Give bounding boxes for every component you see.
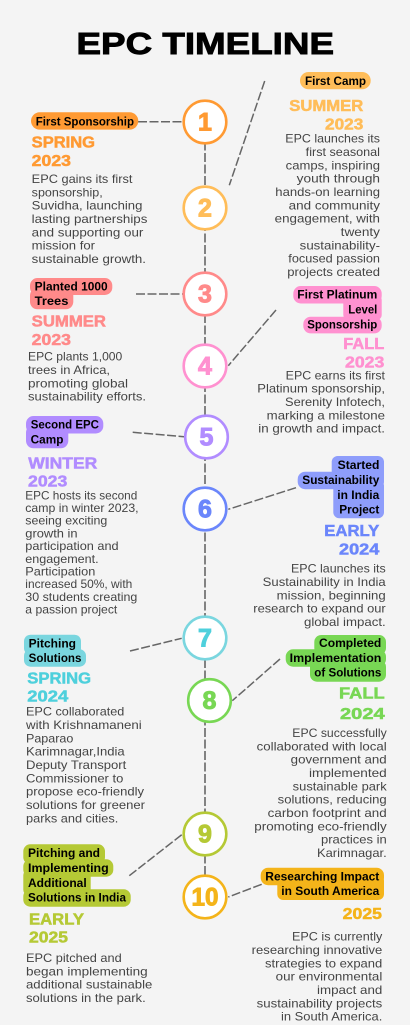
description: twenty: [341, 225, 380, 239]
description: in South America.: [281, 1010, 382, 1024]
season heading: EARLY: [29, 911, 85, 928]
description: sustainable growth.: [32, 252, 146, 266]
milestone 5: second EPC camp: [25, 416, 228, 617]
description: trees in Africa,: [28, 363, 110, 377]
description: growth in: [25, 526, 78, 540]
label pill: [300, 72, 371, 89]
description: youth through: [297, 172, 380, 186]
description: Karimnagar.: [317, 846, 387, 860]
description: Paparao: [26, 731, 74, 745]
milestone 1: first sponsorship: [31, 101, 226, 266]
milestone 10: researching impact: [184, 868, 384, 1024]
number badge 1: [184, 101, 226, 143]
description: solutions, reducing: [278, 793, 387, 807]
description: research to expand our: [253, 602, 386, 616]
description: hands-on learning: [275, 185, 380, 199]
label pill: [31, 112, 138, 130]
label pill: of Solutions: [314, 668, 381, 680]
description: EPC is currently: [292, 930, 382, 944]
label pill: First Camp: [305, 76, 366, 88]
description: camp in winter 2023,: [25, 501, 139, 515]
connector: [229, 81, 265, 185]
description: a passion project: [25, 603, 118, 617]
description: [275, 132, 380, 279]
description: seeing exciting: [25, 514, 107, 528]
season heading: 2025: [29, 930, 68, 947]
description: [25, 488, 139, 617]
description: carbon footprint and: [268, 806, 387, 820]
label pill: Planted 1000: [35, 281, 108, 293]
description: lasting partnerships: [32, 212, 147, 226]
season heading: [343, 336, 385, 371]
season heading: FALL: [339, 685, 385, 702]
label pill: [298, 456, 384, 518]
description: engagement.: [25, 552, 99, 566]
season heading: 2023: [32, 153, 71, 170]
label pill: in South America: [281, 886, 380, 898]
label pill: in India: [337, 490, 380, 502]
description: EPC successfully: [292, 726, 387, 740]
season heading: 2024: [339, 541, 380, 558]
description: and community: [289, 198, 380, 212]
label pill: Researching Impact: [265, 871, 379, 883]
number badge 7: 7: [198, 624, 212, 652]
label pill: Implementation: [290, 653, 381, 665]
description: 30 students creating: [25, 590, 137, 604]
label pill: [24, 635, 86, 667]
milestone 3: planted 1000 trees: [28, 273, 226, 404]
number badge 6: 6: [198, 496, 212, 524]
number badge 4: 4: [198, 352, 212, 380]
description: collaborated with local: [257, 739, 387, 753]
description: Karimnagar,India: [26, 745, 125, 759]
number badge 5: 5: [200, 424, 214, 452]
description: [26, 951, 153, 1005]
season heading: [29, 911, 85, 947]
description: strategies to expand: [265, 956, 382, 970]
description: Suvidha, launching: [32, 199, 142, 213]
label pill: Started: [338, 460, 379, 472]
label pill: Completed: [319, 638, 381, 650]
label pill: [293, 286, 382, 333]
label pill: Project: [339, 505, 379, 517]
description: promoting eco-friendly: [254, 819, 387, 833]
label pill: Solutions: [29, 653, 81, 665]
description: our environmental: [276, 970, 382, 984]
number badge 6: [184, 488, 226, 530]
season heading: EARLY: [324, 523, 380, 540]
season heading: [32, 314, 106, 349]
milestone 6: sustainability in India: [184, 456, 386, 629]
description: focused passion: [288, 252, 380, 266]
description: global impact.: [304, 615, 386, 629]
season heading: 2023: [345, 354, 385, 371]
season heading: 2024: [27, 689, 69, 706]
season heading: 2023: [325, 116, 364, 133]
milestone 4: first platinum sponsorship: [184, 286, 386, 436]
description: solutions in the park.: [26, 991, 146, 1005]
label pill: Implementing: [28, 863, 109, 875]
season heading: FALL: [343, 336, 384, 353]
label pill: Sustainability: [302, 475, 380, 487]
milestone 7: pitching solutions: [24, 617, 226, 825]
label pill: Solutions in India: [28, 893, 127, 905]
connector: [228, 310, 276, 366]
number badge 9: [184, 813, 226, 855]
milestone 8: completed implementation: [188, 635, 388, 860]
description: Serenity Infotech,: [285, 395, 385, 409]
season heading: SPRING: [32, 135, 95, 152]
description: sponsorship,: [32, 185, 103, 199]
number badge 3: [184, 273, 226, 315]
season heading: [27, 670, 91, 706]
label pill: [30, 278, 112, 309]
description: researching innovative: [252, 943, 383, 957]
label pill: Additional: [28, 878, 87, 890]
season heading: SUMMER: [32, 314, 106, 331]
description: EPC collaborated: [26, 705, 124, 719]
description: [25, 705, 145, 825]
description: propose eco-friendly: [26, 785, 144, 799]
description: EPC pitched and: [26, 951, 122, 965]
number badge 10: [184, 876, 226, 918]
description: EPC gains its first: [32, 172, 133, 186]
label pill: [26, 416, 103, 448]
label pill: Camp: [31, 434, 63, 446]
number badge 2: [184, 187, 226, 229]
number badge 8: [188, 679, 231, 722]
label pill: First Sponsorship: [36, 116, 134, 128]
connector: [228, 488, 296, 509]
description: [257, 368, 386, 436]
milestone 9: pitching and implementing: [23, 813, 226, 1005]
description: sustainability projects: [257, 996, 382, 1010]
season heading: [324, 523, 380, 558]
season heading: 2023: [32, 332, 71, 349]
number badge 5: [185, 416, 228, 458]
description: EPC earns its first: [286, 368, 386, 382]
connector: [130, 638, 182, 651]
number badge 7: [184, 617, 226, 659]
label pill: [261, 868, 384, 900]
description: Commissioner to: [26, 771, 124, 785]
connector: [136, 293, 183, 295]
connector: [133, 432, 184, 437]
label pill: Pitching: [29, 638, 76, 650]
description: [252, 930, 383, 1024]
season heading: 2024: [340, 706, 385, 723]
description: sustainability efforts.: [28, 390, 146, 404]
description: [254, 726, 388, 860]
description: increased 50%, with: [25, 577, 132, 591]
description: parks and cities.: [26, 811, 118, 825]
description: [253, 562, 386, 629]
description: participation and: [25, 539, 119, 553]
season heading: 2025: [343, 906, 382, 923]
description: practices in: [321, 833, 387, 847]
season heading: SPRING: [27, 670, 91, 687]
connector: [232, 659, 280, 701]
label pill: Pitching and: [28, 848, 100, 860]
description: [28, 350, 146, 404]
description: mission, beginning: [277, 588, 386, 602]
description: marking a milestone: [267, 408, 385, 422]
label pill: Second EPC: [31, 420, 99, 432]
description: solutions for greener: [26, 798, 145, 812]
description: Deputy Transport: [26, 758, 127, 772]
description: projects created: [287, 265, 380, 279]
season heading: 2023: [28, 474, 68, 491]
description: and supporting our: [32, 225, 143, 239]
number badge 8: 8: [203, 687, 217, 715]
milestone 2: first camp: [184, 72, 380, 279]
description: Participation: [25, 564, 95, 578]
number badge 10: 10: [192, 884, 218, 912]
number badge 4: [184, 345, 226, 387]
number badge 1: 1: [198, 108, 212, 136]
description: Sustainability in India: [263, 575, 386, 589]
number badge 2: 2: [198, 194, 212, 222]
connector: [129, 834, 182, 876]
label pill: [23, 844, 131, 907]
number badge 9: 9: [198, 820, 212, 848]
label pill: First Platinum: [297, 289, 377, 301]
description: EPC plants 1,000: [28, 350, 123, 364]
description: with Krishnamaneni: [25, 718, 142, 732]
description: camps, inspiring: [286, 158, 380, 172]
season heading: SUMMER: [289, 98, 363, 115]
description: sustainability-: [300, 238, 380, 252]
connector: [228, 884, 262, 897]
title: EPC TIMELINE: [76, 26, 334, 61]
description: Platinum sponsorship,: [257, 382, 385, 396]
description: [32, 172, 147, 266]
timeline spine: [204, 130, 206, 918]
description: government and: [291, 753, 387, 767]
season heading: WINTER: [28, 455, 97, 472]
description: sustainable park: [293, 779, 388, 793]
description: additional sustainable: [26, 978, 153, 992]
description: impact and: [317, 983, 382, 997]
season heading: [28, 455, 97, 491]
number badge 3: 3: [198, 280, 212, 308]
label pill: Trees: [35, 296, 68, 308]
description: EPC launches its: [285, 132, 380, 146]
description: EPC launches its: [291, 562, 386, 576]
description: engagement, with: [275, 212, 380, 226]
connector: [138, 121, 183, 123]
description: first seasonal: [306, 145, 380, 159]
label pill: Level: [348, 304, 377, 316]
label pill: [286, 635, 386, 682]
season heading: [32, 135, 95, 170]
description: implemented: [309, 766, 387, 780]
season heading: [339, 685, 385, 723]
season heading: [289, 98, 364, 133]
description: mission for: [32, 239, 95, 253]
description: EPC hosts its second: [25, 488, 137, 502]
description: in growth and impact.: [258, 422, 385, 436]
description: promoting global: [28, 376, 128, 390]
label pill: Sponsorship: [307, 319, 377, 331]
description: began implementing: [26, 964, 148, 978]
